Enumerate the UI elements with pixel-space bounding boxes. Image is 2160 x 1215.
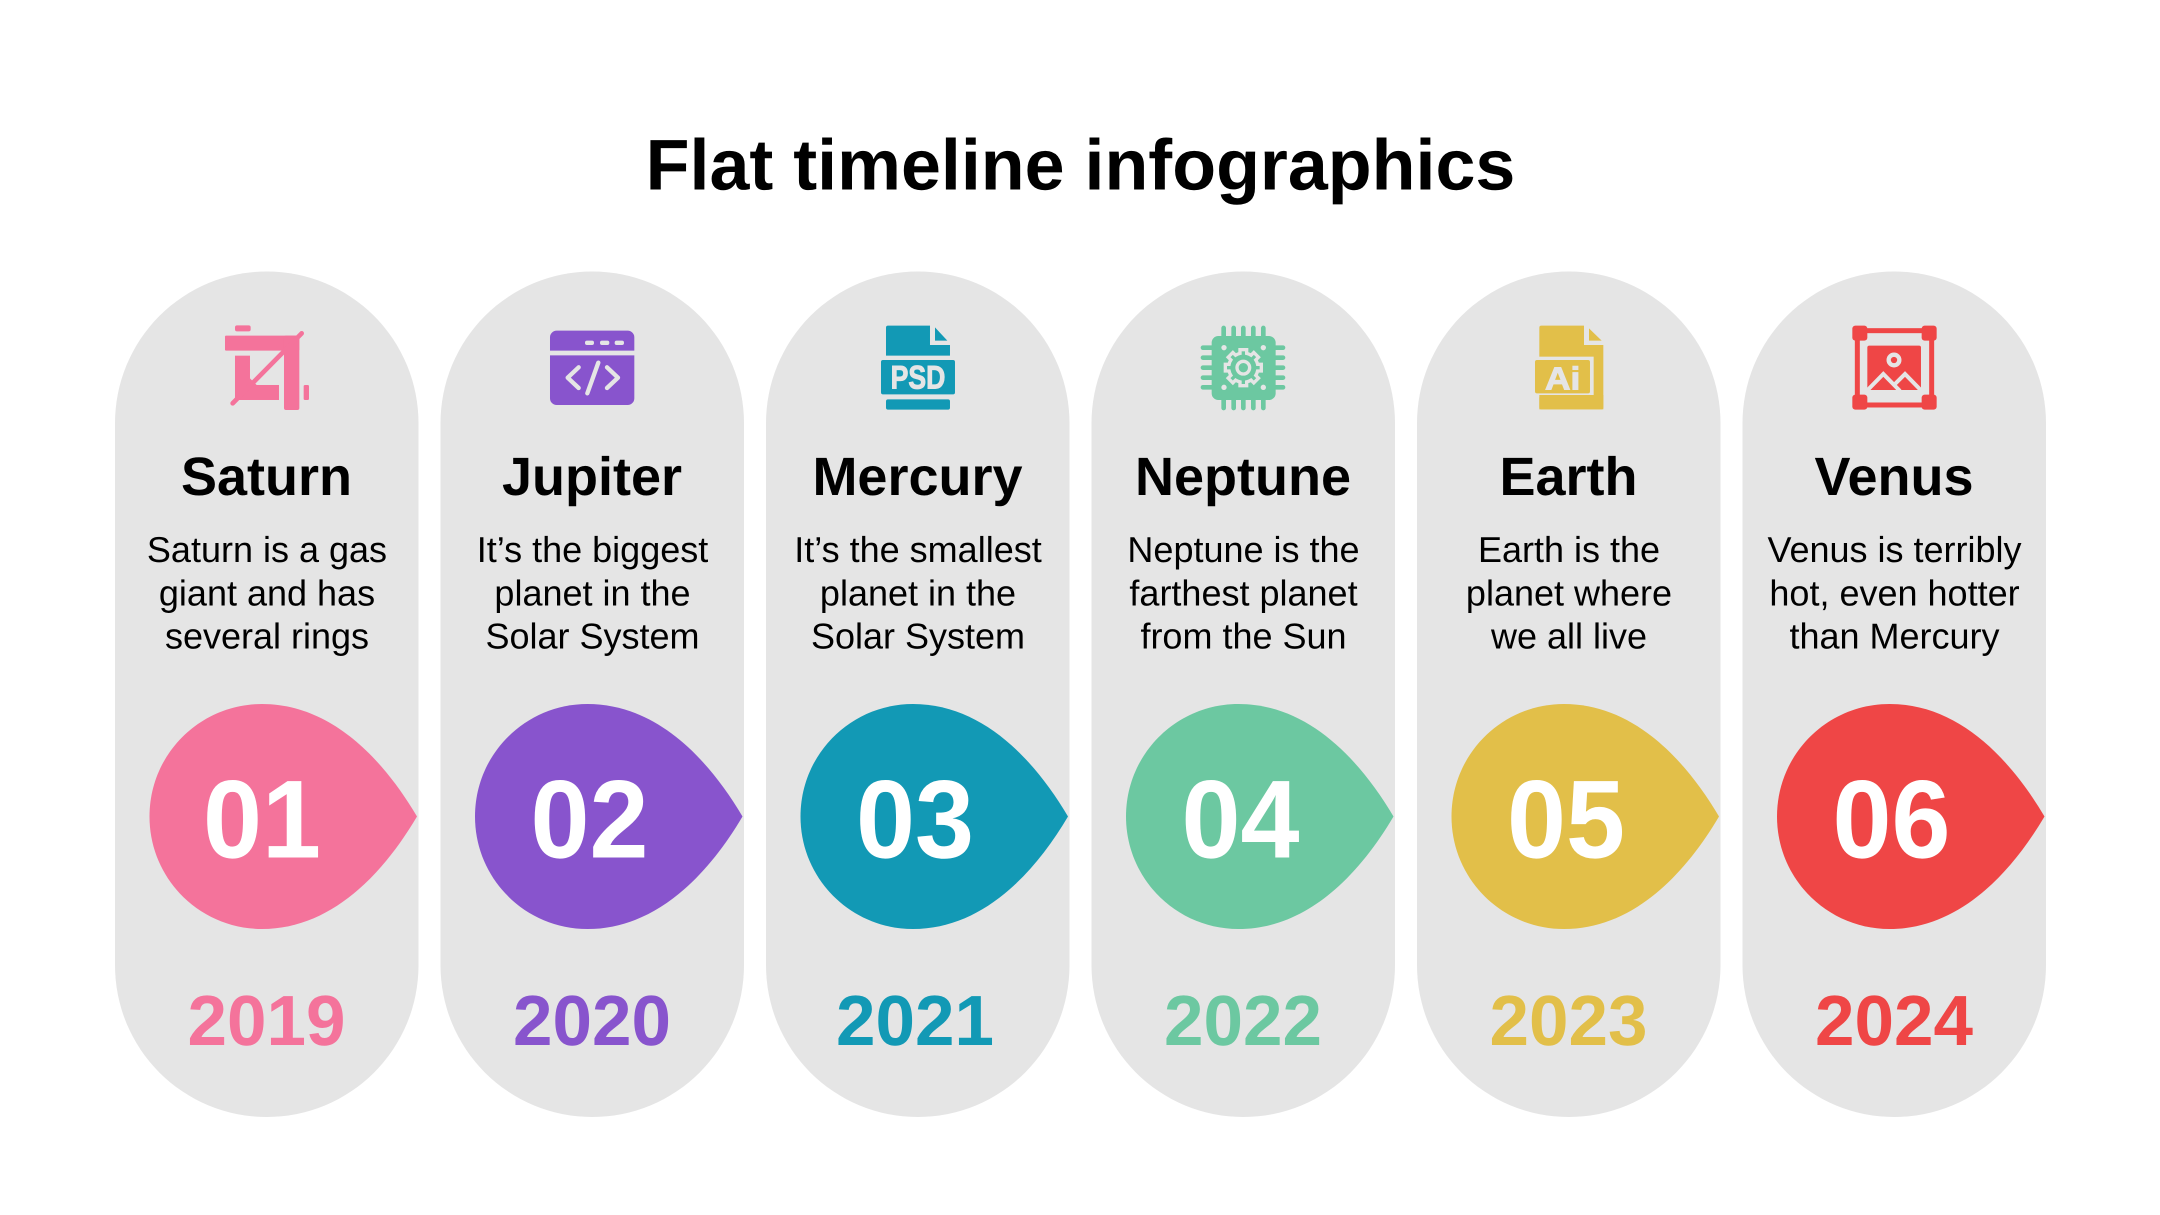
- panel: Earth 2023: [1417, 272, 1720, 1117]
- pill background: [115, 272, 418, 1117]
- panel: Jupiter 2020: [440, 272, 744, 1117]
- icon: code window: [550, 331, 634, 405]
- description: Solar System: [811, 616, 1025, 657]
- step number: 03: [856, 758, 974, 882]
- description: hot, even hotter: [1769, 572, 2020, 613]
- step number: 02: [530, 758, 648, 882]
- panel: Venus 2024: [1742, 272, 2046, 1117]
- year: 2024: [1815, 982, 1973, 1061]
- panel: Mercury 2021: [766, 272, 1070, 1117]
- icon: AI file: Ai: [1545, 361, 1580, 396]
- pill background: [440, 272, 744, 1117]
- title: Flat timeline infographics: [646, 126, 1515, 206]
- icon: crop tool: [225, 325, 309, 410]
- planet name: Jupiter: [502, 447, 682, 507]
- description: from the Sun: [1140, 616, 1347, 657]
- step number: 05: [1507, 758, 1625, 882]
- panel: Saturn 2019: [115, 272, 418, 1117]
- icon: AI file: [1535, 326, 1603, 409]
- planet name: Venus: [1814, 447, 1974, 507]
- planet name: Mercury: [812, 447, 1023, 507]
- teardrop marker: [1777, 704, 2044, 929]
- pill background: [1742, 272, 2046, 1117]
- description: farthest planet: [1129, 572, 1358, 613]
- description: planet in the: [820, 572, 1016, 613]
- planet name: Earth: [1499, 447, 1638, 507]
- icon: PSD file: PSD: [891, 359, 945, 396]
- description: Saturn is a gas: [147, 529, 387, 570]
- pill background: [1092, 272, 1395, 1117]
- planet name: Saturn: [181, 447, 352, 507]
- description: several rings: [165, 616, 369, 657]
- pill background: [766, 272, 1070, 1117]
- teardrop marker: [150, 704, 417, 929]
- description: Earth is the: [1478, 529, 1660, 570]
- pill background: [1417, 272, 1720, 1117]
- icon: image frame: [1852, 326, 1937, 410]
- description: we all live: [1490, 616, 1647, 657]
- description: than Mercury: [1789, 616, 2000, 657]
- description: planet in the: [494, 572, 691, 613]
- description: It’s the biggest: [477, 529, 708, 570]
- description: giant and has: [159, 572, 375, 613]
- step number: 06: [1832, 758, 1950, 882]
- description: Solar System: [485, 616, 700, 657]
- panel: Neptune 2022: [1092, 272, 1395, 1117]
- teardrop marker: [1126, 704, 1394, 929]
- year: 2021: [836, 982, 994, 1061]
- description: Venus is terribly: [1767, 529, 2022, 570]
- description: planet where: [1466, 572, 1672, 613]
- year: 2023: [1490, 982, 1647, 1061]
- planet name: Neptune: [1135, 447, 1351, 507]
- year: 2019: [188, 982, 345, 1061]
- year: 2020: [513, 982, 671, 1061]
- step number: 01: [203, 758, 321, 882]
- description: It’s the smallest: [794, 529, 1042, 570]
- teardrop marker: [475, 704, 742, 929]
- icon: PSD file: [881, 326, 955, 410]
- teardrop marker: [800, 704, 1068, 929]
- step number: 04: [1182, 758, 1300, 882]
- description: Neptune is the: [1127, 529, 1360, 570]
- icon: chip with gear: [1203, 328, 1283, 408]
- teardrop marker: [1452, 704, 1719, 929]
- year: 2022: [1164, 982, 1322, 1061]
